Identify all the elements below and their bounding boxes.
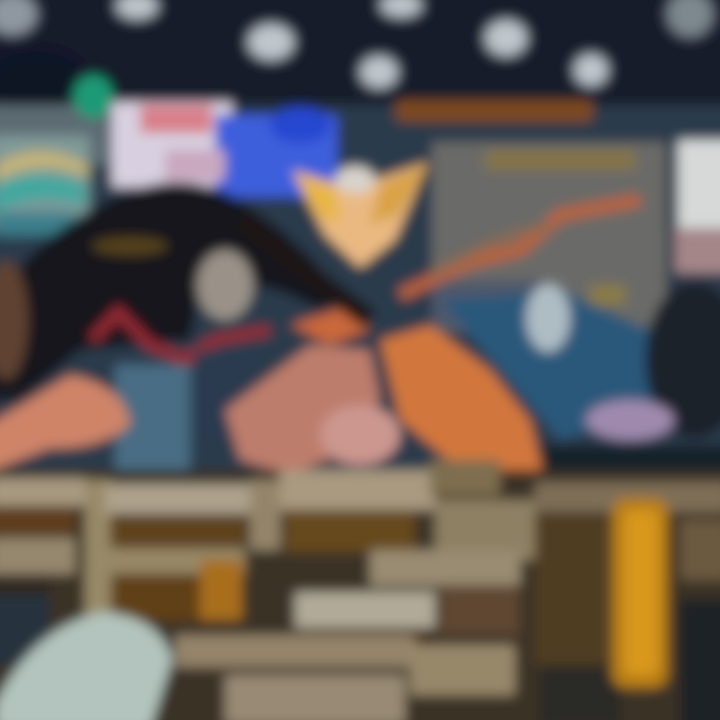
left colour screen (0, 135, 90, 236)
mid wall (0, 105, 720, 475)
red line chart on figure (92, 312, 270, 360)
blue shirt (115, 350, 255, 475)
colour panel (112, 102, 337, 197)
coin stacks (0, 460, 720, 720)
pale coin foreground (0, 612, 172, 720)
yellow V shape (292, 162, 428, 268)
upper left wall (0, 105, 120, 165)
right white panel (675, 140, 720, 273)
dark ceiling with lights (0, 0, 720, 115)
hands (225, 305, 545, 480)
coin stacks base (0, 470, 720, 720)
grey chart panel (400, 142, 666, 332)
pen (240, 220, 370, 320)
orange heading (395, 100, 593, 122)
left arm (0, 375, 130, 475)
dark figure with cap (0, 182, 345, 400)
lower right blue area (440, 282, 720, 485)
green marker (73, 75, 113, 119)
